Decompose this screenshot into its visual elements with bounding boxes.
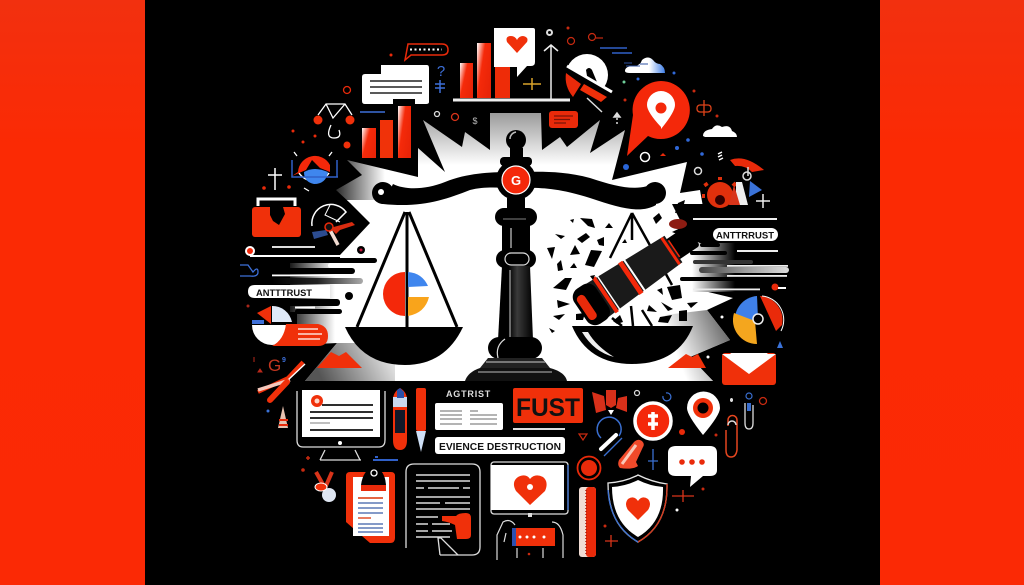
icon: red outlined chat bbox=[390, 44, 448, 60]
icon: compass gauge bbox=[312, 204, 355, 245]
label: antitrust left: ANTTTRUST bbox=[256, 288, 312, 299]
white burst behind the scales bbox=[290, 113, 735, 381]
left speed lines with antitrust label bbox=[245, 246, 377, 314]
icon: blue question mark: ? bbox=[437, 63, 445, 80]
text: agtrist card bbox=[435, 389, 503, 430]
icon: pie chart left bbox=[246, 304, 292, 345]
icon: red ribbon figure bbox=[315, 472, 336, 502]
icon: heart shield bbox=[608, 475, 667, 542]
icon: small scales bbox=[292, 86, 354, 148]
icon: white speech note bbox=[362, 65, 429, 104]
icon: blue link squiggle bbox=[240, 265, 258, 276]
icon: pie chart right bbox=[706, 296, 784, 358]
icon: monitor with heart held in hands bbox=[491, 462, 568, 560]
label: antitrust right: ANTTRRUST bbox=[716, 230, 774, 242]
icon: orange chat card bbox=[549, 111, 578, 128]
G badge: G bbox=[511, 173, 521, 188]
text: fust red box bbox=[513, 388, 583, 430]
icon: red mountains bbox=[317, 352, 706, 368]
text: evidence destruction label bbox=[435, 437, 565, 454]
flying shards bbox=[547, 200, 698, 333]
text: evidence destruction label: EVIENCE DESTRUCTION bbox=[439, 441, 561, 453]
bar chart left bbox=[360, 106, 411, 158]
text: agtrist card: AGTRIST bbox=[446, 389, 491, 399]
icon: white cross bbox=[262, 168, 291, 190]
icon: up arrow with gear bbox=[523, 26, 632, 100]
icon: red G with scissors bbox=[254, 356, 305, 400]
icon: red and blue gauge bbox=[292, 150, 338, 191]
icon: map pin speech bubble bbox=[614, 72, 718, 174]
icon: red pen bbox=[416, 388, 426, 452]
icon: blue question mark bbox=[434, 63, 478, 126]
icon: red ring bbox=[578, 456, 600, 480]
icon: red envelope bbox=[722, 353, 776, 385]
icon: red briefcase bbox=[252, 199, 301, 237]
icon: clouds bbox=[624, 58, 737, 137]
gavel breaking apart bbox=[569, 218, 705, 329]
balance beam bbox=[372, 172, 666, 209]
scale post bbox=[465, 130, 567, 381]
icon: red chat lines bbox=[272, 324, 328, 346]
icon: magnet bbox=[560, 54, 612, 112]
icon: blue question mark: $ bbox=[472, 116, 478, 126]
bottom divider bbox=[305, 381, 713, 383]
text: fust red box: FUST bbox=[516, 394, 580, 422]
icon: marker pen bbox=[393, 388, 407, 450]
icon: paper clips bbox=[726, 393, 766, 457]
icon: heart speech bubble bbox=[494, 28, 535, 77]
right speed lines with antitrust label bbox=[669, 204, 789, 290]
icon: desktop monitor bbox=[266, 390, 398, 472]
icon: location pin bbox=[687, 392, 733, 436]
icon: gear, wrench and arc bbox=[702, 158, 770, 208]
right scale pan bbox=[572, 213, 693, 364]
icon: document with red hand bbox=[406, 464, 480, 555]
icon: clipboard bbox=[346, 466, 395, 543]
icon: red ribbon mark bbox=[592, 390, 627, 415]
icon: red G with scissors: 9 bbox=[282, 357, 286, 364]
left scale pan with coloured logo bbox=[345, 212, 463, 365]
G badge bbox=[496, 160, 536, 200]
icon: blue hook bbox=[579, 390, 671, 456]
icon: red G with scissors: G bbox=[268, 356, 281, 375]
icon: small orange valve bbox=[697, 100, 723, 160]
bar chart top with baseline bbox=[453, 43, 570, 102]
icon: magnifier bbox=[618, 403, 685, 470]
icon: white chat bubble with dots bbox=[668, 446, 717, 512]
icon: thermometer ruler bbox=[579, 487, 618, 557]
